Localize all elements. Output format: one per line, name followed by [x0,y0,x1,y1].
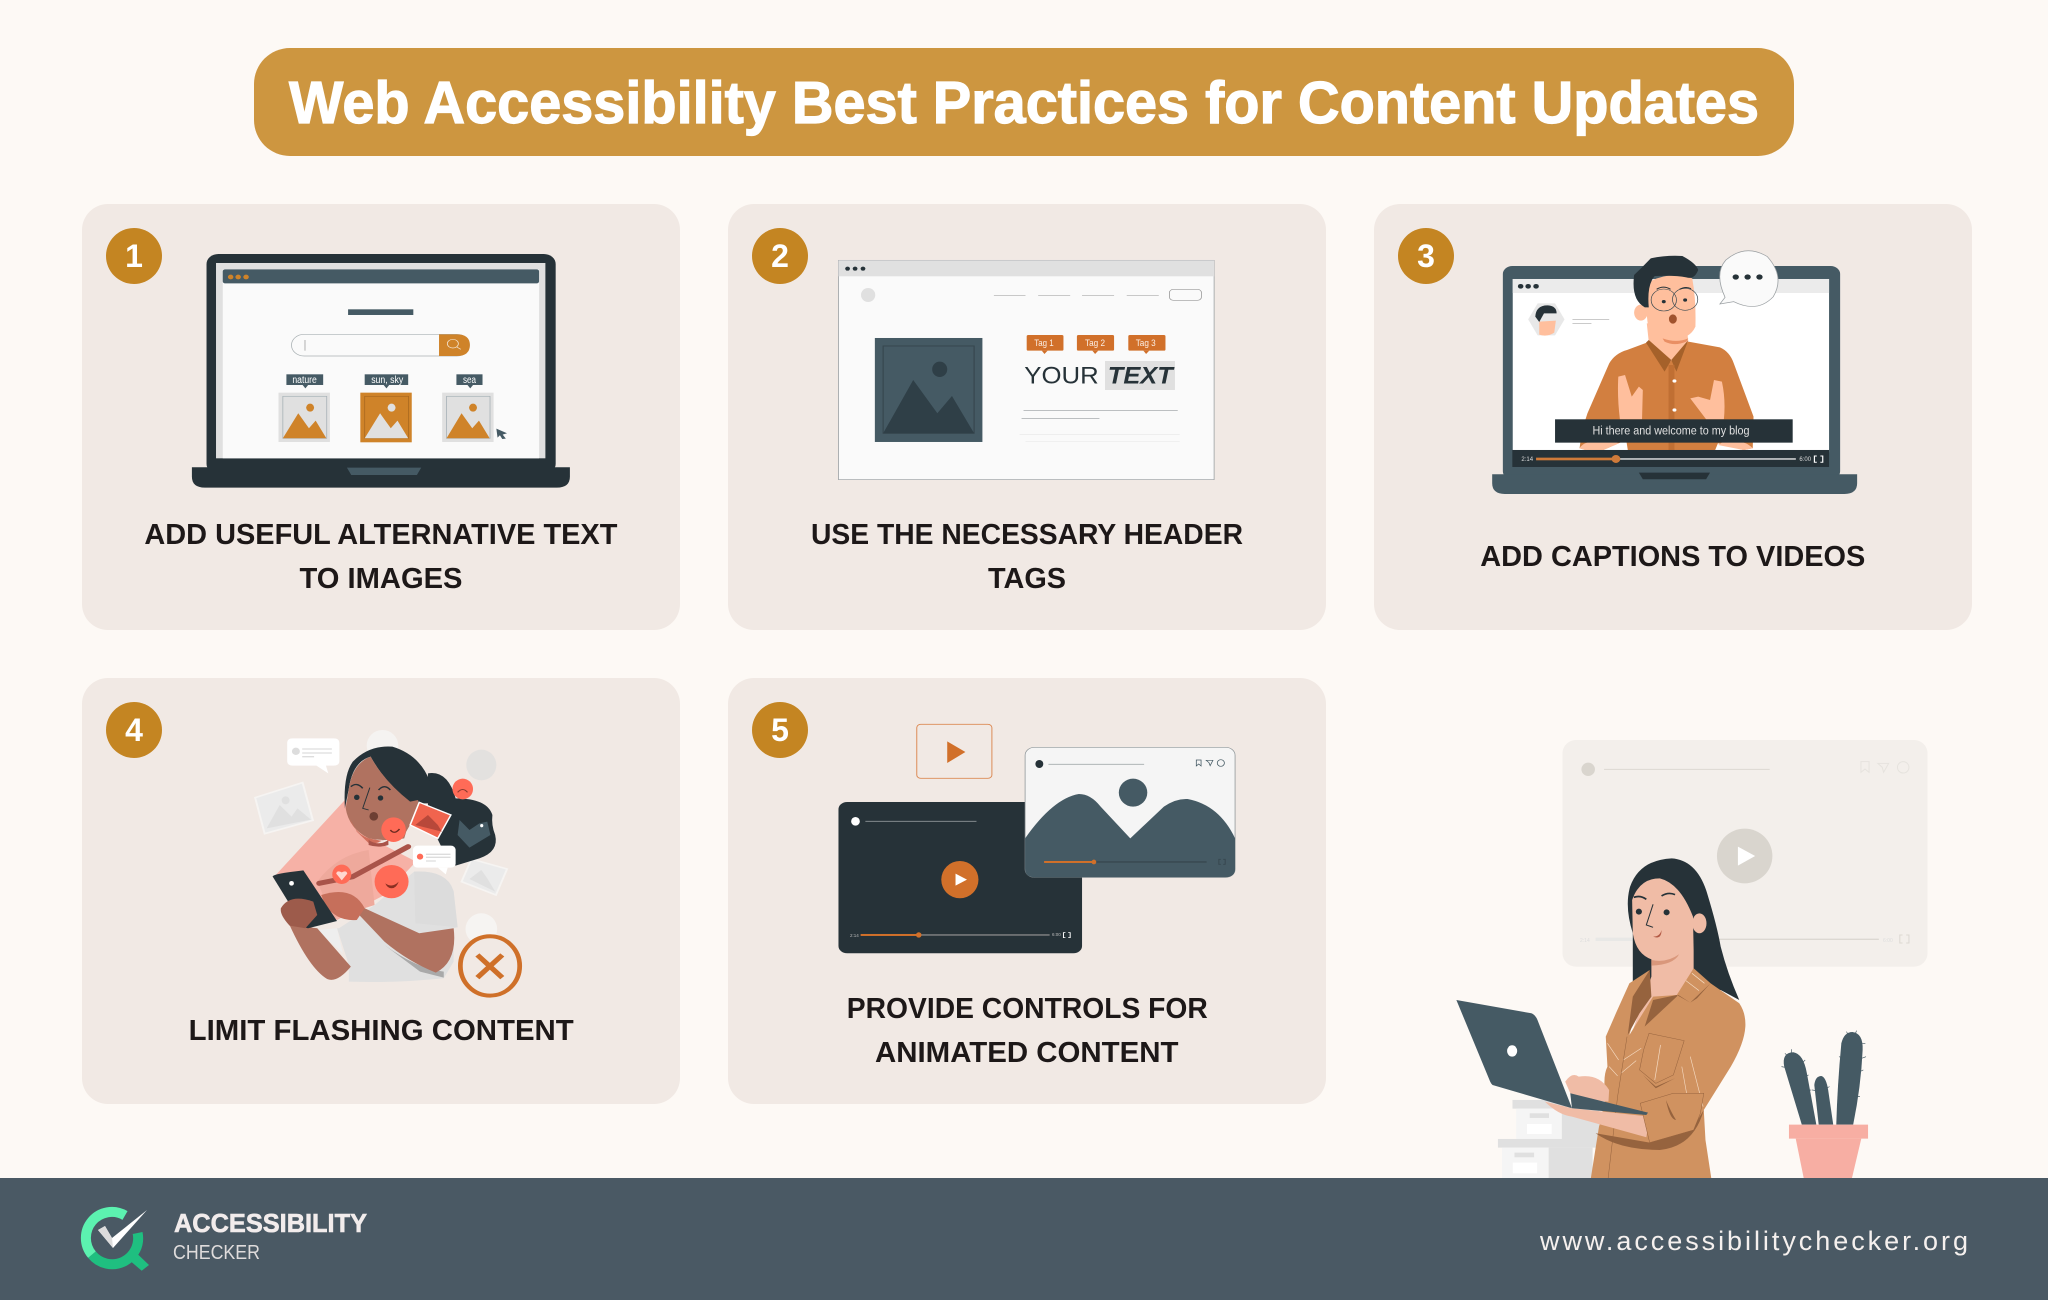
illustration: woman with laptop, video player and cactus: 6:00 [1883,938,1893,944]
woman holding laptop [1456,858,1745,1180]
illustration: laptop with presenter and captions [1492,251,1857,494]
heading: step 2 [811,519,1243,595]
footer bar [0,1178,2048,1300]
illustration: woman overwhelmed by phone content [255,730,520,996]
heading: step 5 [847,993,1208,1069]
illustration: video players with controls: 2:14 [850,933,859,938]
illustration: laptop with presenter and captions: Hi there and welcome to my blog [1592,426,1750,438]
heading: step 2: USE THE NECESSARY HEADER [811,519,1243,551]
storage boxes [1498,1100,1599,1178]
heading: step 4: LIMIT FLASHING CONTENT [189,1015,574,1047]
panel: step 5 animation controls [728,678,1326,1104]
illustration: video players with controls: 6:00 [1052,932,1061,937]
logo: accessibility checker magnifier [86,1210,149,1271]
badge: number 2 [752,228,808,284]
illustration: browser with tags: YOUR [1024,362,1099,389]
illustration: woman with laptop, video player and cactus [1456,740,1928,1180]
title [254,48,1794,156]
panel: step 1 alternative text [82,204,680,630]
badge: number 1: 1 [125,238,143,274]
illustration: woman with laptop, video player and cactus: 2:14 [1580,938,1590,944]
heading: step 1 [144,519,618,595]
cactus in pot [1782,1031,1868,1179]
heading: step 3: ADD CAPTIONS TO VIDEOS [1480,541,1865,573]
website url: www.accessibilitychecker.org [1539,1226,1968,1256]
heading: step 5: ANIMATED CONTENT [875,1037,1179,1069]
brand name: CHECKER [173,1242,260,1264]
badge: number 4 [106,702,162,758]
badge: number 3: 3 [1417,238,1435,274]
heading: step 5: PROVIDE CONTROLS FOR [847,993,1208,1025]
illustration: laptop with image search: sea [463,375,476,386]
badge: number 1 [106,228,162,284]
title: Web Accessibility Best Practices for Content Updates [289,70,1759,136]
illustration: browser with tags [838,260,1214,480]
illustration: laptop with presenter and captions: 6:00 [1799,457,1812,463]
illustration: laptop with image search: nature [292,375,317,386]
illustration: laptop with image search [192,254,570,488]
badge: number 3 [1398,228,1454,284]
illustration: browser with tags: TEXT [1108,362,1175,389]
panel: step 4 flashing content [82,678,680,1104]
illustration: browser with tags: Tag 2 [1085,338,1105,349]
heading: step 1: ADD USEFUL ALTERNATIVE TEXT [144,519,618,551]
illustration: laptop with image search: sun, sky [371,375,403,386]
illustration: browser with tags: Tag 3 [1136,338,1156,349]
panel: step 3 captions [1374,204,1972,630]
brand name [173,1208,367,1264]
badge: number 2: 2 [771,238,789,274]
illustration: laptop with presenter and captions: 2:14 [1521,457,1534,463]
illustration: video players with controls [838,724,1235,953]
badge: number 5 [752,702,808,758]
heading: step 2: TAGS [988,563,1066,595]
badge: number 5: 5 [771,712,789,748]
badge: number 4: 4 [125,712,143,748]
panel: step 2 header tags [728,204,1326,630]
brand name: ACCESSIBILITY [174,1208,367,1238]
heading: step 1: TO IMAGES [300,563,462,595]
ghost video player [1562,740,1928,967]
illustration: browser with tags: Tag 1 [1034,338,1054,349]
